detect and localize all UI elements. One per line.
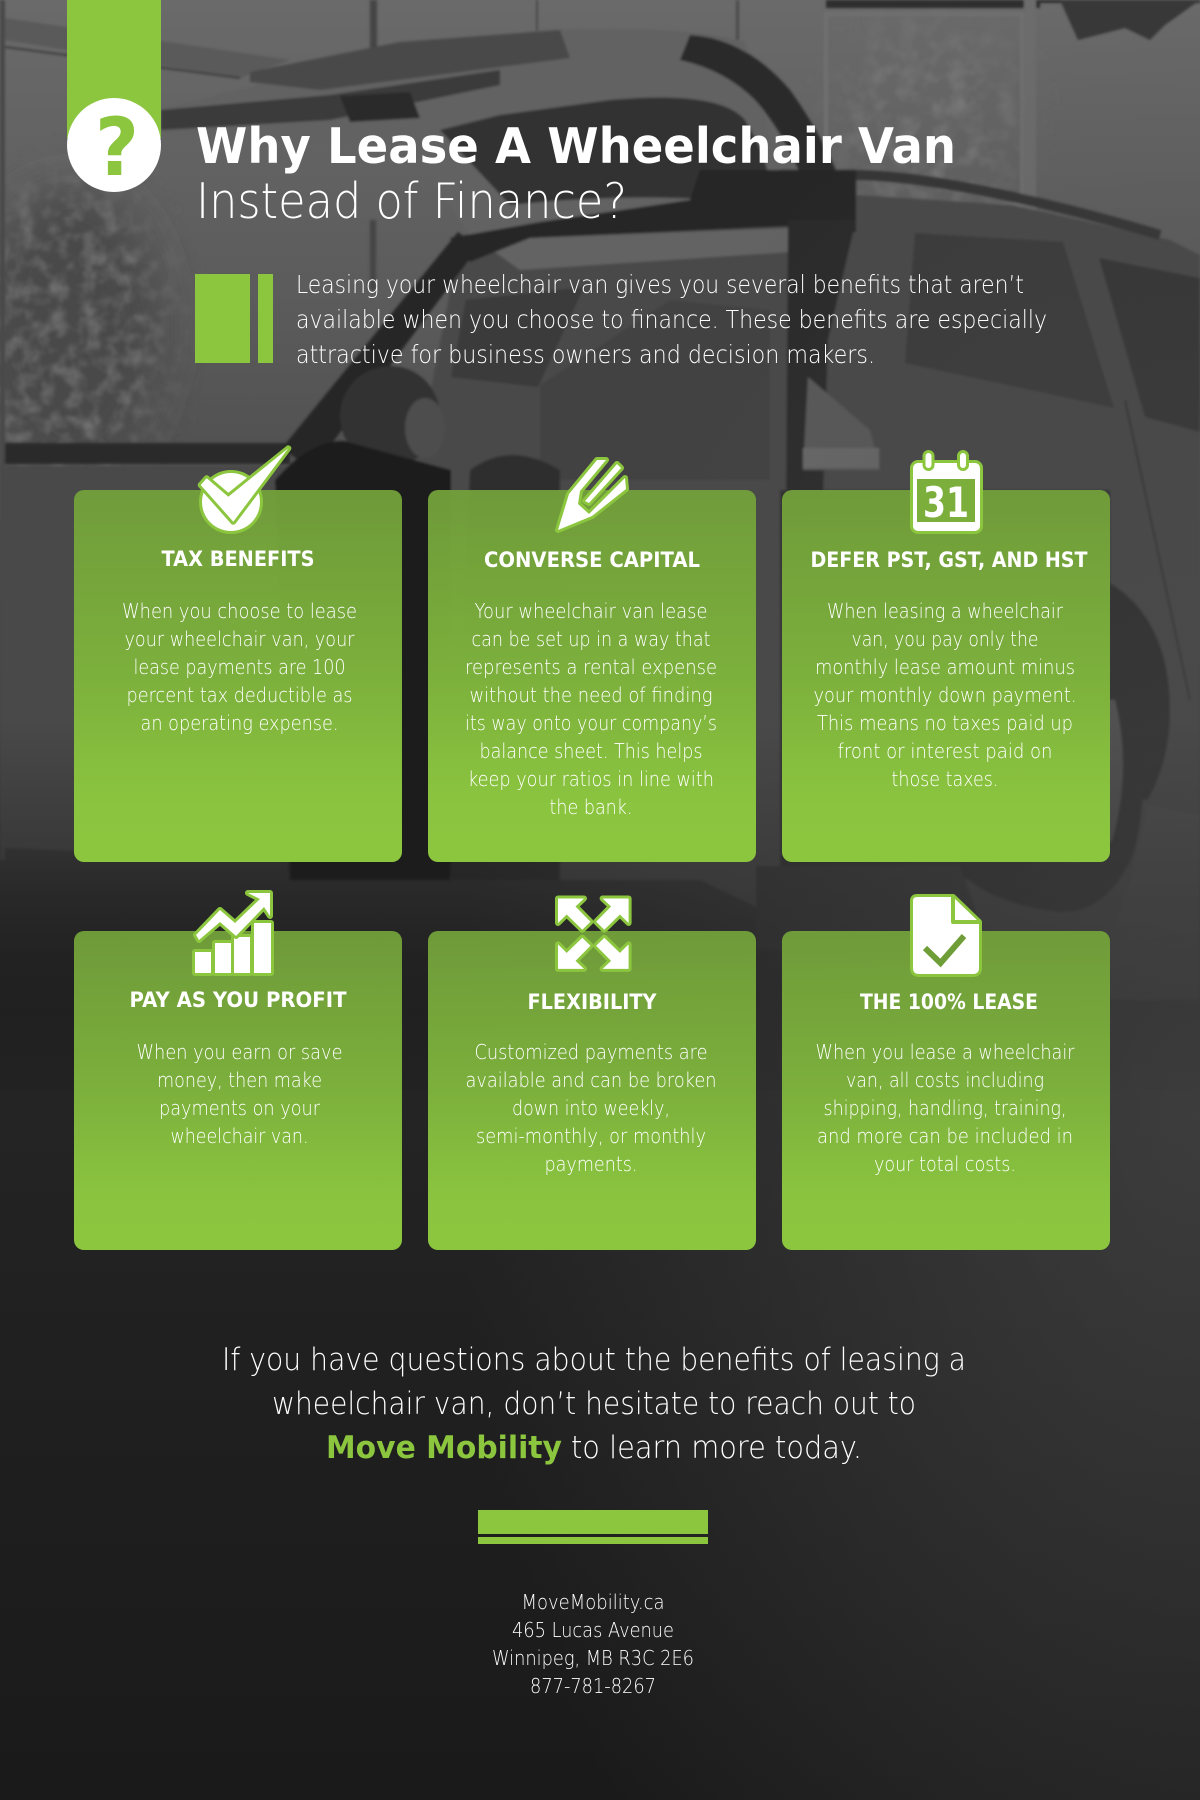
body: tax benefits: percent tax deductible as <box>126 683 352 707</box>
crossbar and pillars <box>450 170 856 262</box>
body: converse capital: its way onto your company’s <box>465 711 717 735</box>
panel: defer taxes <box>782 453 1110 862</box>
body: the 100% lease: When you lease a wheelchair <box>816 1040 1075 1064</box>
intro accent bars <box>195 274 273 363</box>
icon: rising bar chart <box>195 893 271 973</box>
icon: calendar <box>913 453 980 531</box>
heading: tax benefits: TAX BENEFITS <box>162 547 314 572</box>
closing call to action <box>222 1342 966 1466</box>
body: tax benefits: an operating expense. <box>140 711 338 735</box>
body: defer taxes: van, you pay only the <box>852 627 1038 651</box>
body: flexibility: down into weekly, <box>512 1096 670 1120</box>
contact details: Winnipeg, MB R3C 2E6 <box>492 1646 694 1670</box>
body: flexibility: available and can be broken <box>466 1068 716 1092</box>
title <box>196 118 956 230</box>
heading: the 100% lease: THE 100% LEASE <box>860 990 1038 1015</box>
icon: check mark in circle <box>201 448 288 531</box>
body: converse capital: without the need of finding <box>470 683 712 707</box>
body: the 100% lease: your total costs. <box>874 1152 1016 1176</box>
icon: four outward arrows <box>558 898 629 969</box>
contact details: MoveMobility.ca <box>522 1590 664 1614</box>
person <box>340 366 440 466</box>
intro text <box>296 270 1047 369</box>
body: converse capital: represents a rental expense <box>465 655 717 679</box>
van body <box>330 195 1200 1000</box>
contact details: 465 Lucas Avenue <box>512 1618 674 1642</box>
van lower side, wheel arch and tire <box>780 490 1110 880</box>
closing call to action: If you have questions about the benefits of leasing a <box>222 1342 966 1378</box>
body: flexibility: payments. <box>544 1152 638 1176</box>
footer divider bars <box>478 1510 708 1544</box>
closing call to action: to learn more today. <box>571 1430 862 1466</box>
body: the 100% lease: van, all costs including <box>846 1068 1044 1092</box>
wall beams and frames <box>5 18 290 78</box>
title: Why Lease A Wheelchair Van <box>196 118 956 175</box>
body: converse capital <box>465 599 717 819</box>
body: tax benefits: your wheelchair van, your <box>124 627 355 651</box>
window frame at left <box>5 443 290 464</box>
body: flexibility <box>466 1040 716 1176</box>
body: converse capital: keep your ratios in line with <box>468 767 714 791</box>
closing call to action: wheelchair van, don’t hesitate to reach out to <box>272 1386 916 1422</box>
heading: converse capital: CONVERSE CAPITAL <box>484 548 700 573</box>
panel: pay as you profit <box>74 893 402 1250</box>
roof rail <box>853 175 1160 235</box>
title: Instead of Finance? <box>196 173 627 230</box>
icon: document with check <box>913 897 979 974</box>
body: converse capital: balance sheet. This helps <box>480 739 702 763</box>
contact details: 877-781-8267 <box>530 1674 656 1698</box>
rear opening interior <box>420 228 800 500</box>
body: converse capital: the bank. <box>550 795 632 819</box>
body: defer taxes: monthly lease amount minus <box>815 655 1075 679</box>
header accent: green band with question mark circle <box>67 0 161 194</box>
body: tax benefits <box>122 599 357 735</box>
icon: calendar: 31 <box>923 478 969 527</box>
body: converse capital: Your wheelchair van lease <box>474 599 708 623</box>
heading: defer taxes: DEFER PST, GST, AND HST <box>810 548 1088 573</box>
body: tax benefits: lease payments are 100 <box>134 655 346 679</box>
body: the 100% lease: and more can be included in <box>817 1124 1073 1148</box>
body: defer taxes <box>814 599 1076 791</box>
panel: flexibility <box>428 898 756 1250</box>
body: defer taxes: When leasing a wheelchair <box>827 599 1064 623</box>
body: flexibility: Customized payments are <box>474 1040 708 1064</box>
body: defer taxes: your monthly down payment. <box>814 683 1076 707</box>
heading: pay as you profit: PAY AS YOU PROFIT <box>130 988 347 1013</box>
body: flexibility: semi-monthly, or monthly <box>476 1124 706 1148</box>
body: converse capital: can be set up in a way that <box>472 627 710 651</box>
panel: the 100% lease <box>782 897 1110 1250</box>
panel: tax benefits <box>74 448 402 862</box>
body: pay as you profit: payments on your <box>159 1096 321 1120</box>
tail light <box>803 377 880 470</box>
body: defer taxes: those taxes. <box>892 767 998 791</box>
body: the 100% lease <box>816 1040 1075 1176</box>
intro text: Leasing your wheelchair van gives you several benefits that aren’t <box>296 270 1024 299</box>
closing call to action: Move Mobility <box>326 1430 562 1466</box>
icon: question mark: ? <box>95 101 139 194</box>
body: pay as you profit <box>136 1040 342 1148</box>
tailgate frame <box>680 35 856 236</box>
contact details <box>492 1590 694 1698</box>
body: defer taxes: This means no taxes paid up <box>817 711 1073 735</box>
heading: flexibility: FLEXIBILITY <box>528 990 657 1015</box>
side windows <box>905 233 1114 408</box>
body: tax benefits: When you choose to lease <box>122 599 357 623</box>
intro text: available when you choose to finance. These benefits are especially <box>296 305 1047 334</box>
body: defer taxes: front or interest paid on <box>838 739 1052 763</box>
intro text: attractive for business owners and decision makers. <box>296 340 875 369</box>
body: pay as you profit: When you earn or save <box>136 1040 342 1064</box>
body: pay as you profit: wheelchair van. <box>170 1124 308 1148</box>
tailgate panel <box>161 29 790 235</box>
body: pay as you profit: money, then make <box>157 1068 322 1092</box>
panel: converse capital <box>428 460 756 862</box>
icon: pen nib <box>558 460 626 530</box>
body: the 100% lease: shipping, handling, training, <box>824 1096 1066 1120</box>
